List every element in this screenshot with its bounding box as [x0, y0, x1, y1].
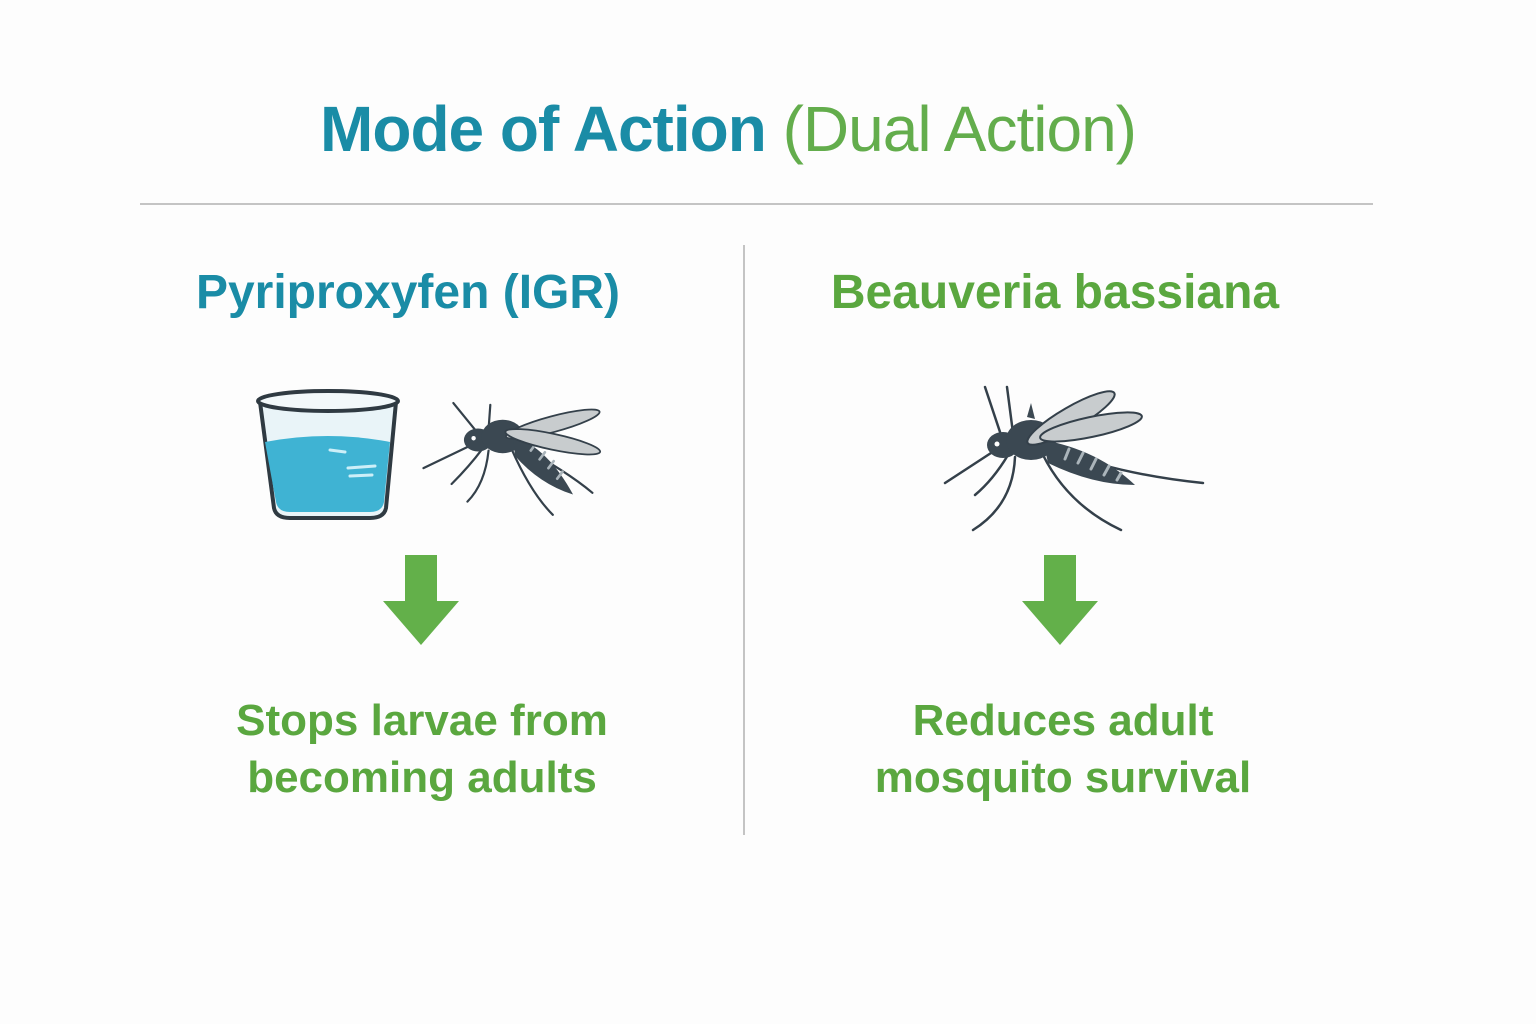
result text left: Stops larvae from [236, 696, 608, 745]
title: Mode of Action (Dual Action) [320, 93, 1136, 165]
result text right [875, 696, 1251, 802]
arrow: down right [1022, 555, 1098, 645]
result text left: becoming adults [247, 753, 597, 802]
icon: mosquito right [945, 383, 1203, 530]
panel: beauveria [831, 266, 1280, 802]
result text right: Reduces adult [913, 696, 1213, 745]
result text right: mosquito survival [875, 753, 1251, 802]
icon: mosquito [423, 403, 602, 515]
heading: Beauveria: Beauveria bassiana [831, 266, 1279, 319]
heading: Pyriproxyfen: Pyriproxyfen (IGR) [196, 266, 620, 319]
arrow: down left [383, 555, 459, 645]
result text left [236, 696, 608, 802]
panel: pyriproxyfen [196, 266, 620, 802]
icon: water cup [258, 391, 398, 518]
icons: cup and mosquito [256, 389, 602, 645]
